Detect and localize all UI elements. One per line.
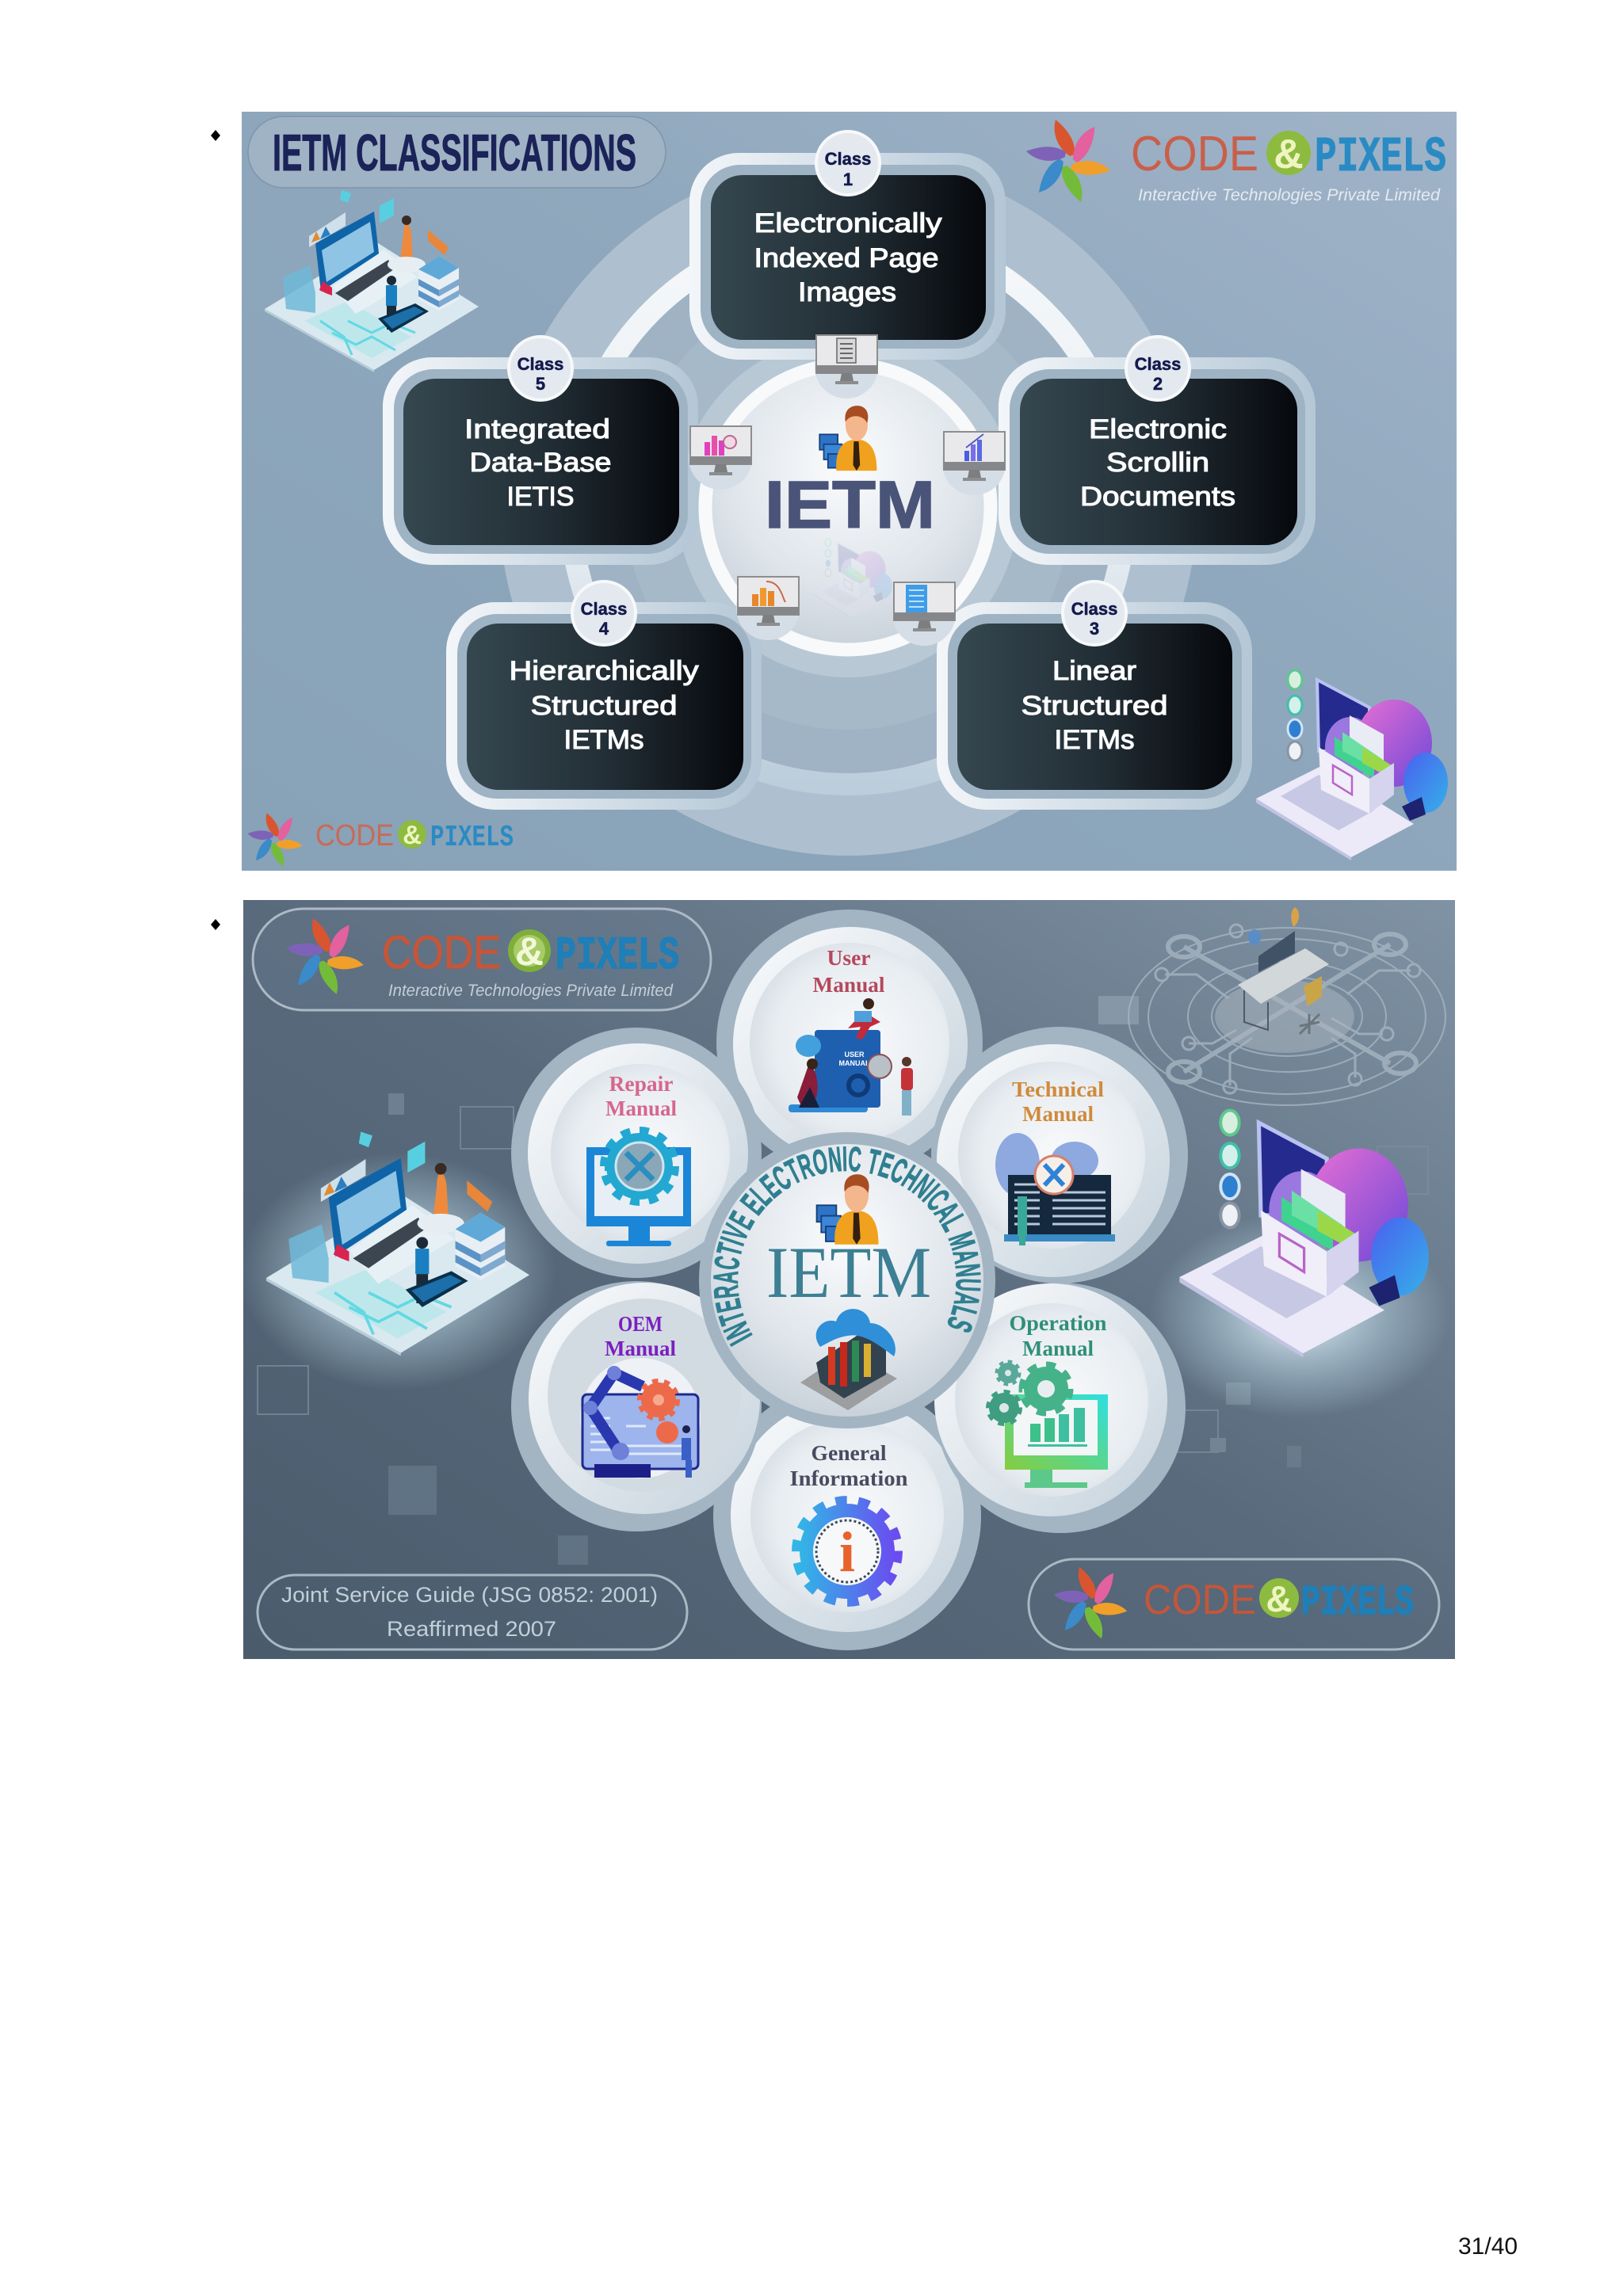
circle: repair manual: Manual: [605, 1097, 677, 1120]
circle: general information: [713, 1383, 981, 1650]
card: class 1: Images: [798, 277, 896, 307]
card: class 4: Structured: [531, 691, 677, 721]
circle: user manual: User: [827, 946, 871, 970]
logo pill: top left: Interactive Technologies Private Limited: [388, 982, 674, 1000]
badge: class 4: [572, 582, 636, 645]
badge: class 2: [1126, 337, 1190, 400]
faint cloud laptop: [812, 539, 892, 619]
badge: class 3: 3: [1090, 619, 1099, 639]
logo: bottom left: PIXELS: [430, 821, 514, 855]
illustration: laptop platform: [266, 1131, 529, 1356]
badge: class 4: 4: [599, 619, 609, 639]
glow behind cloud laptop: [1149, 1212, 1450, 1418]
hub: IETM: IETM: [765, 467, 935, 542]
logo: top right: CODE: [1131, 127, 1258, 181]
icon: user manual book: MANUAL: [838, 1059, 870, 1067]
card: class 4: IETMs: [564, 725, 643, 755]
circle: operation manual: Operation: [1010, 1311, 1106, 1335]
title: IETM CLASSIFICATIONS: [273, 124, 636, 181]
circle: user manual: [716, 910, 983, 1176]
panel: manuals: [243, 900, 1455, 1659]
badge: class 1: [816, 132, 880, 195]
badge: class 3: [1063, 582, 1126, 645]
circle: technical manual: [931, 1027, 1188, 1283]
badge: class 5: 5: [536, 374, 545, 394]
bullet: second slide: [211, 919, 220, 930]
icon: technical monitor: [995, 1133, 1115, 1245]
logo: top right: Interactive Technologies Private Limited: [1138, 186, 1441, 204]
logo pill: top left: PIXELS: [556, 931, 679, 982]
circle: general information: Information: [789, 1466, 908, 1490]
person icon: [819, 406, 876, 471]
card: class 5: IETIS: [507, 482, 574, 512]
icon: robot arm monitor: [582, 1366, 698, 1478]
card: class 1: Indexed Page: [754, 243, 938, 273]
icon: info gear: i: [839, 1520, 855, 1584]
icon: info gear: [798, 1502, 896, 1600]
pill: joint service guide: [258, 1575, 687, 1650]
logo pill: top left: CODE: [382, 927, 501, 978]
card: class 4: [446, 602, 762, 810]
badge: class 5: [509, 337, 572, 400]
card: class 3: IETMs: [1054, 725, 1135, 755]
card: class 3: [937, 602, 1252, 810]
illustration: laptop platform: [265, 190, 479, 372]
illustration: cloud laptop: [1179, 1110, 1429, 1357]
card: class 2: [999, 357, 1316, 565]
center circle: IETM: INTERACTIVE ELECTRONIC TECHNICAL MANUALS: [713, 1146, 981, 1347]
network desk illustration: [1128, 907, 1445, 1105]
icon: cloud server: [800, 1309, 897, 1410]
logo: bottom left: CODE: [315, 819, 394, 852]
panel background: [243, 900, 1455, 1659]
glow behind laptop illustration: [239, 1153, 556, 1390]
card: class 2: Documents: [1080, 482, 1235, 512]
card: class 5: [383, 357, 698, 565]
circle: user manual: Manual: [813, 973, 885, 997]
badge: class 5: Class: [517, 354, 563, 374]
monitor icon: blue document: [892, 582, 956, 646]
circle: technical manual: Manual: [1022, 1102, 1094, 1126]
pill: joint service guide: Reaffirmed 2007: [387, 1617, 556, 1641]
circle: operation manual: Manual: [1022, 1337, 1094, 1360]
circle: OEM manual: OEM: [618, 1312, 663, 1336]
icon: operation monitor: [988, 1362, 1108, 1488]
monitor icon: pink chart: [689, 426, 752, 490]
badge: class 4: Class: [581, 599, 627, 619]
center circle: IETM: IETM: [766, 1232, 931, 1313]
logo: top right: PIXELS: [1315, 129, 1446, 185]
logo pill: top left: [253, 909, 711, 1010]
curved title: [738, 1171, 957, 1336]
decorative squares: [258, 996, 1428, 1565]
page number: 31/40: [1458, 2233, 1518, 2260]
card: class 3: Structured: [1021, 691, 1168, 721]
icon: gear monitor: [586, 1131, 691, 1246]
circle: operation manual: [934, 1283, 1186, 1533]
logo pill: bottom right: CODE: [1144, 1577, 1256, 1623]
badge: class 2: Class: [1135, 354, 1181, 374]
logo pill: top left: &: [515, 929, 544, 974]
bullet: first slide: [211, 130, 220, 141]
logo: bottom left: &: [403, 820, 422, 849]
center circle: IETM: [699, 1132, 995, 1428]
title pill: [248, 116, 666, 188]
panel: IETM classifications: [242, 112, 1457, 871]
circle: general information: General: [812, 1441, 887, 1465]
monitor icon: blue chart: [942, 432, 1006, 495]
badge: class 1: 1: [843, 170, 853, 189]
pill: joint service guide: Joint Service Guide (JSG 0852: 2001): [281, 1583, 658, 1607]
card: class 2: Electronic: [1089, 414, 1227, 444]
logo pill: bottom right: &: [1266, 1578, 1293, 1619]
logo: top right: [1025, 120, 1446, 204]
circle: OEM manual: [511, 1281, 762, 1531]
badge: class 3: Class: [1071, 599, 1117, 619]
illustration: cloud laptop: [1256, 670, 1448, 860]
card: class 1: Electronically: [754, 208, 941, 238]
concentric hub rings: [499, 158, 1197, 856]
card: class 2: Scrollin: [1106, 448, 1209, 478]
badge: class 1: Class: [825, 149, 871, 169]
circle: OEM manual: Manual: [605, 1337, 676, 1360]
card: class 5: Integrated: [464, 414, 610, 444]
circle: repair manual: [511, 1028, 762, 1278]
icon: user manual book: USER: [844, 1051, 865, 1058]
card: class 5: Data-Base: [469, 448, 612, 478]
logo pill: bottom right: PIXELS: [1301, 1579, 1414, 1627]
card: class 3: Linear: [1052, 656, 1136, 686]
monitor icon: orange chart: [736, 577, 800, 640]
badge: class 2: 2: [1153, 374, 1163, 394]
panel background: [242, 112, 1457, 871]
card: class 4: Hierarchically: [509, 656, 699, 686]
logo pill: bottom right: [1029, 1559, 1439, 1650]
hub: IETM: [765, 406, 935, 619]
circle: technical manual: Technical: [1012, 1077, 1105, 1101]
person icon: [817, 1174, 878, 1245]
logo: bottom left: [247, 813, 514, 867]
logo: top right: &: [1274, 132, 1304, 177]
monitor icon: document: [815, 335, 878, 399]
circle: repair manual: Repair: [609, 1072, 674, 1096]
icon: user manual book: [789, 998, 913, 1116]
card: class 1: [689, 153, 1006, 360]
